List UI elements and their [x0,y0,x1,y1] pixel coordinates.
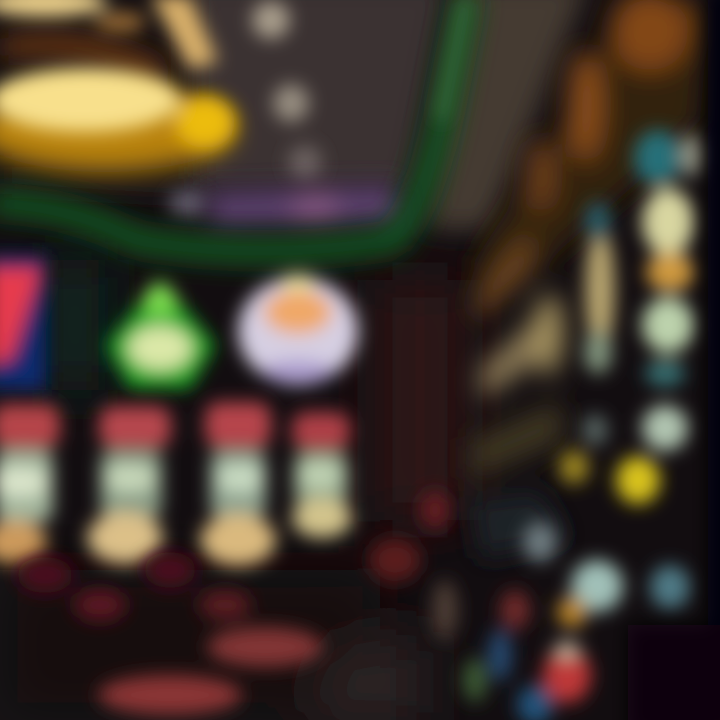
right wall of machines [470,0,710,560]
sign: red and blue triangle [0,255,46,390]
slot machine 1 [0,404,60,564]
lower accents [616,456,660,504]
slot machine 2 [87,406,171,564]
ceiling lamp [0,34,235,172]
lower room shadows [0,260,465,720]
neon signs row [0,255,358,390]
slot machine 4 [292,412,352,538]
purple strip [205,185,405,226]
green neon band [0,0,468,251]
ceiling lights [168,1,322,217]
ceiling [0,0,590,230]
sign: green [106,278,215,388]
sign: white and orange circle [238,274,358,385]
bright column [634,130,682,186]
far machine columns [475,0,710,320]
red stools [17,490,450,715]
slot machines [0,402,352,566]
right edge shadow [628,0,720,720]
slot machine 3 [200,402,276,566]
